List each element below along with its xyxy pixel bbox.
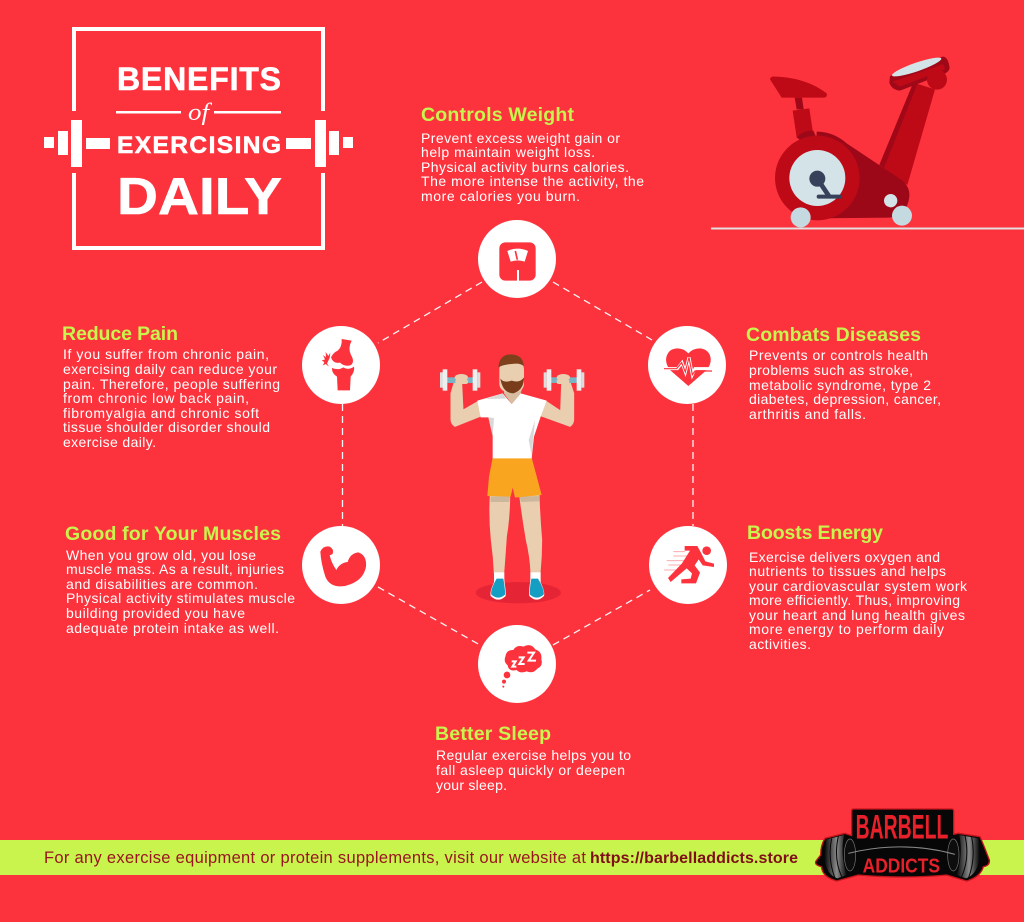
body text: fall asleep quickly or deepen [436, 762, 625, 778]
heading: Good for Your Muscles [65, 523, 281, 545]
panel: boosts energy [747, 522, 968, 652]
logo word: addicts: ADDICTS [863, 855, 940, 878]
panel: combats diseases [746, 324, 941, 422]
body text: and disabilities are common. [66, 576, 258, 592]
dashed hexagon connectors [342, 282, 693, 645]
heading: Boosts Energy [747, 522, 883, 544]
body text: from chronic low back pain, [63, 390, 249, 406]
icon: sprinting runner [649, 526, 727, 604]
body text: help maintain weight loss. [421, 144, 595, 160]
icon: heart with pulse [648, 326, 726, 404]
body text: exercising daily can reduce your [63, 361, 277, 377]
heading: Reduce Pain [62, 323, 178, 345]
exercise bike illustration [711, 54, 1024, 230]
body text: your heart and lung health gives [749, 607, 965, 623]
title: benefits: BENEFITS [117, 61, 281, 97]
body text: tissue shoulder disorder should [63, 419, 270, 435]
title block [44, 29, 353, 248]
body text: Physical activity stimulates muscle [66, 590, 295, 606]
body text: more efficiently. Thus, improving [749, 592, 960, 608]
dumbbell right [544, 369, 584, 391]
panel: controls weight [421, 104, 644, 204]
body text: If you suffer from chronic pain, [63, 346, 269, 362]
panel: good for your muscles [65, 523, 295, 636]
body text: metabolic syndrome, type 2 [749, 377, 931, 393]
title frame [74, 29, 323, 248]
heading: Combats Diseases [746, 324, 921, 346]
body text: problems such as stroke, [749, 362, 913, 378]
body text: nutrients to tissues and helps [749, 563, 946, 579]
body text: Physical activity burns calories. [421, 159, 629, 175]
footer banner [0, 840, 1024, 875]
body text [63, 346, 280, 450]
body text [421, 130, 644, 204]
logo: barbell addicts [816, 808, 989, 881]
icon: flexed bicep [302, 526, 380, 604]
body text: exercise daily. [63, 434, 156, 450]
barbell decoration [44, 111, 353, 167]
title: exercising: EXERCISING [117, 132, 281, 159]
body text [66, 547, 295, 636]
icon: weighing scale [478, 220, 556, 298]
body text [749, 549, 968, 652]
body text [436, 747, 631, 793]
banner text: For any exercise equipment or protein supplements, visit our website at [44, 849, 586, 867]
body text: When you grow old, you lose [66, 547, 256, 563]
title: of: of [188, 100, 213, 126]
body text: your sleep. [436, 777, 507, 793]
banner url: https://barbelladdicts.store [590, 850, 798, 867]
body text [749, 347, 941, 422]
body text: building provided you have [66, 605, 245, 621]
body text: your cardiovascular system work [749, 578, 968, 594]
body text: Prevents or controls health [749, 347, 928, 363]
central figure with dumbbells [440, 354, 584, 603]
body text: pain. Therefore, people suffering [63, 376, 280, 392]
heading: Better Sleep [435, 723, 551, 745]
panel: better sleep [435, 723, 631, 793]
body text: diabetes, depression, cancer, [749, 391, 941, 407]
icon: sleep bubble [478, 625, 556, 703]
body text: arthritis and falls. [749, 406, 866, 422]
body text: Exercise delivers oxygen and [749, 549, 940, 565]
runner body [668, 546, 714, 583]
floor line [711, 228, 1024, 230]
body text: muscle mass. As a result, injuries [66, 561, 284, 577]
icon: knee joint [302, 326, 380, 404]
title: daily: DAILY [117, 168, 282, 226]
dumbbell left [440, 369, 480, 391]
body text: Regular exercise helps you to [436, 747, 631, 763]
panel: reduce pain [62, 323, 280, 450]
body text: Prevent excess weight gain or [421, 130, 620, 146]
body text: fibromyalgia and chronic soft [63, 405, 259, 421]
heading: Controls Weight [421, 104, 574, 126]
body text: The more intense the activity, the [421, 173, 644, 189]
body text: more calories you burn. [421, 188, 580, 204]
body text: more energy to perform daily [749, 621, 944, 637]
logo word: barbell: BARBELL [856, 808, 948, 846]
body text: adequate protein intake as well. [66, 620, 279, 636]
figure shadow [476, 582, 561, 603]
body text: activities. [749, 636, 811, 652]
